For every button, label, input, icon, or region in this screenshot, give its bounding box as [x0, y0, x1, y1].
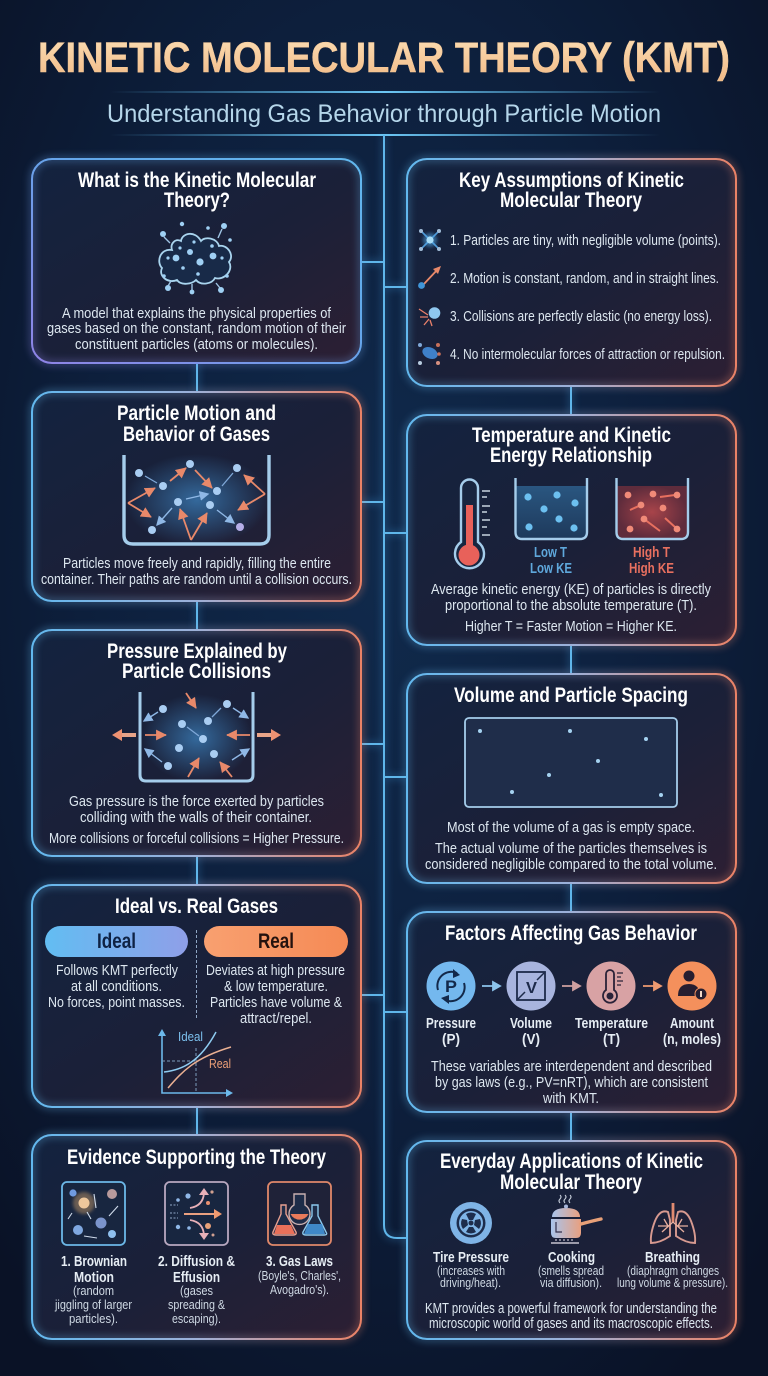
- heading: factors: Factors Affecting Gas Behavior: [445, 922, 697, 945]
- text: gas laws: 3. Gas Laws: [266, 1254, 333, 1270]
- text: volume: The actual volume of the particles themselves is: [435, 841, 707, 857]
- item 3: 3. Collisions are perfectly elastic (no energy loss).: [450, 309, 712, 325]
- text: brownian: [54, 1254, 132, 1326]
- heading: applications: Molecular Theory: [500, 1171, 642, 1194]
- text: real: & low temperature.: [224, 979, 328, 995]
- text: particle motion: container. Their paths are random until a collision occurs.: [41, 572, 352, 588]
- label: temperature: (T): [603, 1032, 620, 1048]
- label: high: [629, 545, 674, 577]
- heading: evidence: Evidence Supporting the Theory: [67, 1146, 326, 1169]
- pill: real: Real: [258, 930, 294, 953]
- heading: what is KMT: What is the Kinetic Molecular: [78, 169, 316, 192]
- diagram: container with moving particles: [124, 454, 269, 546]
- text: real: attract/repel.: [240, 1011, 312, 1027]
- label: pressure: (P): [442, 1032, 460, 1048]
- text: diffusion: escaping).: [172, 1312, 221, 1326]
- icon: straight motion: [418, 266, 441, 289]
- text: temperature: Average kinetic energy (KE) of particles is directly: [431, 582, 712, 598]
- text: particle motion: Particles move freely and rapidly, filling the entire: [63, 556, 331, 572]
- heading: temperature: Temperature and Kinetic: [472, 424, 671, 447]
- icon: gas law flasks: [268, 1182, 331, 1245]
- label: tire pressure: [433, 1250, 509, 1290]
- text: brownian: jiggling of larger: [54, 1298, 132, 1312]
- heading: key assumptions: [459, 169, 684, 212]
- label: low: Low KE: [530, 561, 572, 577]
- container: high temperature: [616, 478, 688, 539]
- heading: key assumptions: Molecular Theory: [500, 189, 642, 212]
- text: ideal: at all conditions.: [71, 979, 162, 995]
- label: volume: Volume: [510, 1016, 552, 1032]
- text: real: [206, 963, 345, 1027]
- label: breathing: lung volume & pressure).: [617, 1276, 728, 1290]
- connector lines: [197, 135, 571, 1238]
- chart: ideal vs real curves: Real: [209, 1056, 231, 1071]
- label: temperature: [575, 1016, 648, 1048]
- chart: ideal vs real curves: [158, 1029, 233, 1097]
- icon: cooking pot: [551, 1195, 601, 1243]
- arrow: volume to temperature: [562, 982, 580, 990]
- heading: particle motion: Particle Motion and: [117, 402, 276, 425]
- text: volume: Most of the volume of a gas is empty space.: [447, 820, 695, 836]
- subtitle: Understanding Gas Behavior through Particle Motion: [107, 100, 661, 128]
- text: volume: considered negligible compared to the total volume.: [425, 857, 717, 873]
- text: temperature: Higher T = Faster Motion = Higher KE.: [465, 619, 677, 635]
- panel: everyday applications: [407, 1141, 736, 1339]
- heading: applications: Everyday Applications of Kinetic: [440, 1150, 703, 1173]
- text: brownian: Motion: [74, 1270, 114, 1286]
- panel: temperature: [407, 415, 736, 645]
- icon: pressure: [426, 962, 476, 1010]
- label: tire pressure: (increases with: [437, 1264, 505, 1278]
- label: temperature: Temperature: [575, 1016, 648, 1032]
- panel: key assumptions: [407, 159, 736, 386]
- label: amount: [663, 1016, 721, 1048]
- text: ideal: No forces, point masses.: [48, 995, 185, 1011]
- icon: elastic collision: [419, 307, 440, 326]
- text: pressure: More collisions or forceful collisions = Higher Pressure.: [49, 831, 344, 847]
- heading: pressure: Pressure Explained by: [107, 640, 287, 663]
- text: gas laws: (Boyle's, Charles',: [258, 1269, 341, 1283]
- text: definition: [47, 306, 346, 353]
- label: amount: (n, moles): [663, 1032, 721, 1048]
- label: low: Low T: [534, 545, 567, 561]
- label: cooking: Cooking: [548, 1250, 595, 1266]
- panel: what is KMT: [32, 159, 361, 363]
- text: factors: These variables are interdependent and described: [431, 1059, 712, 1075]
- text: diffusion: spreading &: [168, 1298, 226, 1312]
- label: high: High KE: [629, 561, 674, 577]
- label: pressure: Pressure: [426, 1016, 476, 1032]
- text: definition: gases based on the constant, random motion of their: [47, 321, 346, 337]
- icon: temperature: [586, 962, 636, 1010]
- heading: pressure: [107, 640, 287, 683]
- text: temperature: proportional to the absolute temperature (T).: [445, 598, 697, 614]
- text: definition: A model that explains the physical properties of: [62, 306, 332, 322]
- text: factors: [431, 1059, 712, 1107]
- text: volume: [425, 820, 717, 873]
- label: cooking: via diffusion).: [540, 1276, 602, 1290]
- text: diffusion: Effusion: [173, 1270, 220, 1286]
- heading: particle motion: [117, 402, 276, 446]
- label: volume: (V): [522, 1032, 540, 1048]
- label: breathing: Breathing: [645, 1250, 700, 1266]
- chart: ideal vs real curves: Ideal: [178, 1029, 203, 1044]
- text: gas laws: [258, 1254, 341, 1297]
- panel: evidence: [32, 1135, 361, 1339]
- icon: diffusion: [165, 1182, 228, 1245]
- text: pressure: [49, 794, 344, 847]
- label: breathing: (diaphragm changes: [627, 1264, 719, 1278]
- text: diffusion: [158, 1254, 235, 1326]
- text: definition: constituent particles (atoms or molecules).: [75, 337, 318, 353]
- panel: volume: [407, 674, 736, 883]
- label: amount: Amount: [670, 1016, 714, 1032]
- heading: temperature: Energy Relationship: [490, 444, 652, 467]
- heading: key assumptions: Key Assumptions of Kinetic: [459, 169, 684, 192]
- text: diffusion: 2. Diffusion &: [158, 1254, 235, 1270]
- pill: ideal: Ideal: [97, 930, 136, 953]
- arrow: pressure to volume: [482, 982, 500, 990]
- icon: thermometer: [455, 480, 490, 568]
- heading: applications: [440, 1150, 703, 1194]
- icon: no forces: [418, 343, 441, 365]
- label: volume: [510, 1016, 552, 1048]
- text: diffusion: (gases: [180, 1284, 213, 1298]
- text: temperature: [431, 582, 712, 635]
- heading: volume: Volume and Particle Spacing: [454, 684, 688, 707]
- label: pressure: [426, 1016, 476, 1048]
- item 2: 2. Motion is constant, random, and in straight lines.: [450, 271, 719, 287]
- pill: real: [204, 926, 348, 957]
- panel: particle motion: [32, 392, 361, 601]
- text: particle motion: [41, 556, 352, 588]
- text: real: Deviates at high pressure: [206, 963, 345, 979]
- icon: gas cloud: [159, 222, 232, 294]
- text: gas laws: Avogadro's).: [270, 1283, 329, 1297]
- heading: ideal vs real: Ideal vs. Real Gases: [115, 895, 278, 918]
- text: pressure: Gas pressure is the force exerted by particles: [69, 794, 324, 810]
- text: applications summary: [425, 1301, 717, 1332]
- text: ideal: Follows KMT perfectly: [56, 963, 179, 979]
- label: cooking: [538, 1250, 604, 1290]
- heading: temperature: [472, 424, 671, 467]
- text: brownian: particles).: [69, 1312, 118, 1326]
- icon: pressure: P: [445, 977, 457, 996]
- panel: factors: [407, 912, 736, 1112]
- icon: tiny particles: [419, 229, 441, 251]
- text: brownian: 1. Brownian: [61, 1254, 127, 1270]
- icon: volume: V: [526, 980, 537, 997]
- pill: ideal: [45, 926, 188, 957]
- text: factors: by gas laws (e.g., PV=nRT), which are consistent: [435, 1075, 708, 1091]
- icon: tire: [450, 1202, 492, 1244]
- label: low: [530, 545, 572, 577]
- label: high: High T: [633, 545, 670, 561]
- icon: brownian motion: [62, 1182, 125, 1245]
- text: factors: with KMT.: [542, 1091, 599, 1107]
- arrow: temperature to amount: [643, 982, 661, 990]
- panel: ideal vs real: [32, 885, 361, 1107]
- label: tire pressure: Tire Pressure: [433, 1250, 509, 1266]
- label: tire pressure: driving/heat).: [440, 1276, 501, 1290]
- heading: pressure: Particle Collisions: [122, 660, 271, 683]
- heading: particle motion: Behavior of Gases: [123, 423, 270, 446]
- heading: what is KMT: [78, 169, 316, 212]
- text: real: Particles have volume &: [210, 995, 342, 1011]
- panel: pressure: [32, 630, 361, 856]
- diagram: sparse particles: [465, 718, 677, 807]
- icon: volume: [506, 962, 556, 1010]
- diagram: pressure container: [112, 692, 281, 782]
- icon: lungs: [651, 1203, 695, 1243]
- text: ideal: [48, 963, 185, 1011]
- heading: what is KMT: Theory?: [164, 189, 230, 212]
- label: breathing: [617, 1250, 728, 1290]
- container: low temperature: [516, 478, 587, 539]
- text: brownian: (random: [73, 1284, 114, 1298]
- text: pressure: colliding with the walls of their container.: [80, 810, 312, 826]
- icon: amount: [668, 962, 716, 1010]
- label: cooking: (smells spread: [538, 1264, 604, 1278]
